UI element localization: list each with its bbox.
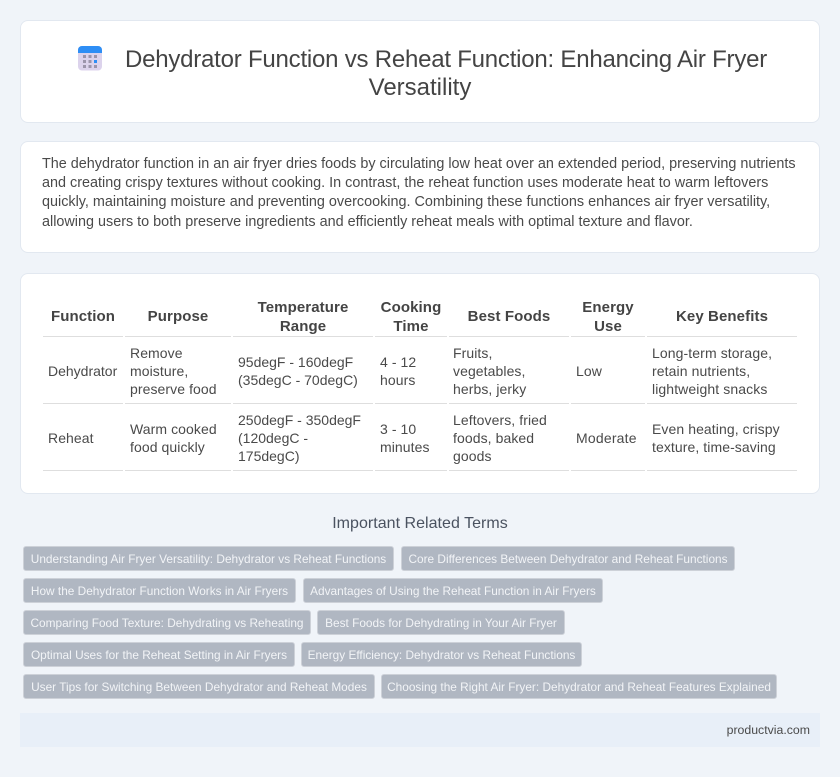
footer [20,713,820,747]
row: dehydrator: moisture, [130,363,188,379]
row: dehydrator: Dehydrator [48,363,117,379]
related term tags [23,546,777,699]
text block: allowing users to both preserve ingredients and efficiently reheat meals with optimal texture and flavor. [42,214,693,230]
row: reheat [48,412,780,464]
panel: title [20,20,820,123]
panel: introduction [20,141,820,253]
row: dehydrator: Low [576,363,602,379]
related term tags: How the Dehydrator Function Works in Air Fryers [31,584,288,598]
row: reheat: Leftovers, fried [453,412,547,428]
row: reheat: 175degC) [238,448,300,464]
heading [125,46,767,101]
related term tags: Core Differences Between Dehydrator and Reheat Functions [408,552,728,566]
table [43,299,797,471]
table header: Key Benefits [676,308,768,325]
related term tags: User Tips for Switching Between Dehydrator and Reheat Modes [31,680,367,694]
row: dehydrator: Fruits, [453,345,492,361]
row: reheat: Reheat [48,430,94,446]
table header: Function [51,308,115,325]
row: dehydrator: (35degC - 70degC) [238,372,358,388]
row: dehydrator: Remove [130,345,183,361]
related term tags: Choosing the Right Air Fryer: Dehydrator and Reheat Features Explained [387,680,771,694]
row: reheat: Warm cooked [130,421,217,437]
row: dehydrator: retain nutrients, [652,363,750,379]
row: reheat: Moderate [576,430,637,446]
row: dehydrator: preserve food [130,381,217,397]
row: reheat: goods [453,448,492,464]
table header [51,299,768,335]
related term tags: Best Foods for Dehydrating in Your Air Fryer [325,616,557,630]
table header: Temperature [258,299,348,316]
row: reheat: (120degC - [238,430,308,446]
row: dehydrator [48,345,772,397]
row: reheat: minutes [380,439,430,455]
row: dehydrator: vegetables, [453,363,526,379]
table header: Energy [582,299,634,316]
text block [42,156,796,230]
related term tags: Optimal Uses for the Reheat Setting in Air Fryers [31,648,287,662]
row: dehydrator: 95degF - 160degF [238,354,353,370]
row: dehydrator: Long-term storage, [652,345,772,361]
heading: Versatility [369,74,471,101]
text block: The dehydrator function in an air fryer dries foods by circulating low heat over an extended period, preserving nutrients [42,156,796,172]
footer source: productvia.com [727,723,810,737]
row: dehydrator: 4 - 12 [380,354,416,370]
table header: Purpose [148,308,208,325]
row: reheat: texture, time-saving [652,439,776,455]
related term tags: Comparing Food Texture: Dehydrating vs Reheating [30,616,304,630]
table header: Cooking [381,299,441,316]
row: reheat: 3 - 10 [380,421,416,437]
icon: calendar [78,46,102,70]
related term tags: Energy Efficiency: Dehydrator vs Reheat Functions [308,648,575,662]
text block: quickly, maintaining moisture and preventing overcooking. Combining these functions enhances air fryer versatility, [42,194,770,210]
heading: Dehydrator Function vs Reheat Function: Enhancing Air Fryer [125,46,767,73]
related term tags: Understanding Air Fryer Versatility: Dehydrator vs Reheat Functions [31,552,386,566]
table header: Use [594,318,622,335]
table header: Time [393,318,429,335]
row: dehydrator: herbs, jerky [453,381,526,397]
row: dehydrator: hours [380,372,415,388]
heading: related terms: Important Related Terms [332,515,508,532]
related term tags: Advantages of Using the Reheat Function in Air Fryers [310,584,596,598]
row: reheat: food quickly [130,439,205,455]
text block: and creating crispy textures without cooking. In contrast, the reheat function uses moderate heat to warm leftovers [42,175,768,191]
panel: comparison table [20,273,820,494]
table header: Best Foods [468,308,550,325]
row: dehydrator: lightweight snacks [652,381,767,397]
row: reheat: 250degF - 350degF [238,412,361,428]
row: reheat: foods, baked [453,430,534,446]
table header: Range [280,318,326,335]
row: reheat: Even heating, crispy [652,421,780,437]
